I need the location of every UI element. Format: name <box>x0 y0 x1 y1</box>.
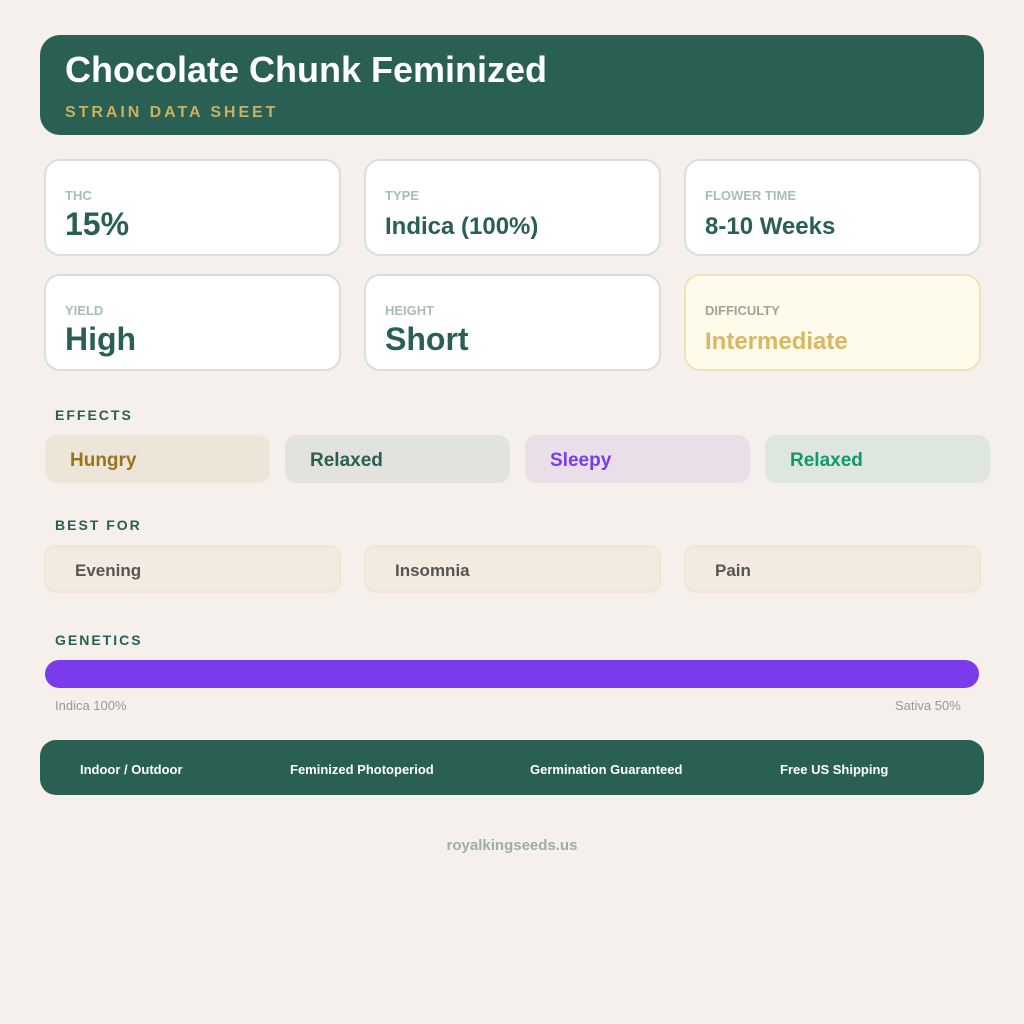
stat card: Height: HEIGHT <box>385 303 434 318</box>
best-for chip: Pain <box>684 545 981 593</box>
stat card: Flower Time: FLOWER TIME <box>705 188 796 203</box>
stat card: Yield: High <box>65 321 136 357</box>
subtitle: STRAIN DATA SHEET <box>65 104 278 121</box>
stat card: Yield <box>44 274 341 371</box>
stat card: Yield: YIELD <box>65 303 103 318</box>
effect chip: Relaxed: Relaxed <box>310 450 383 471</box>
stat card: Flower Time: 8-10 Weeks <box>705 213 835 240</box>
stat card: Type: Indica (100%) <box>385 213 538 240</box>
effect chip: Hungry: Hungry <box>70 450 136 471</box>
effect chip: Relaxed <box>285 435 510 483</box>
effect chip: Sleepy: Sleepy <box>550 450 611 471</box>
effect chip: Relaxed green: Relaxed <box>790 450 863 471</box>
header banner <box>40 35 984 135</box>
effect chip: Hungry <box>45 435 270 483</box>
stat card: Difficulty: DIFFICULTY <box>705 303 780 318</box>
section heading: genetics: GENETICS <box>55 632 143 648</box>
best-for chip: Evening <box>44 545 341 593</box>
genetics label: indica: Indica 100% <box>55 698 127 713</box>
stat card: THC <box>44 159 341 256</box>
title: Chocolate Chunk Feminized <box>65 49 547 90</box>
website url: royalkingseeds.us <box>447 837 577 854</box>
stat card: THC: THC <box>65 188 92 203</box>
stat card: Height <box>364 274 661 371</box>
section heading: effects: EFFECTS <box>55 407 133 423</box>
footer item: germination: Germination Guaranteed <box>530 762 682 777</box>
stat card: Flower Time <box>684 159 981 256</box>
best-for chip: Evening: Evening <box>75 561 141 580</box>
effect chip: Sleepy <box>525 435 750 483</box>
effect chip: Relaxed green <box>765 435 990 483</box>
best-for chip: Insomnia: Insomnia <box>395 561 470 580</box>
genetics bar <box>45 660 979 688</box>
stat card: Difficulty <box>684 274 981 371</box>
footer item: feminized: Feminized Photoperiod <box>290 762 434 777</box>
genetics label: sativa: Sativa 50% <box>895 698 961 713</box>
footer item: shipping: Free US Shipping <box>780 762 888 777</box>
best-for chip: Pain: Pain <box>715 561 751 580</box>
footer item: indoor outdoor: Indoor / Outdoor <box>80 762 183 777</box>
stat card: Type <box>364 159 661 256</box>
stat card: Difficulty: Intermediate <box>705 328 848 355</box>
stat card: Type: TYPE <box>385 188 419 203</box>
best-for chip: Insomnia <box>364 545 661 593</box>
stat card: Height: Short <box>385 321 469 357</box>
stat card: THC: 15% <box>65 206 129 242</box>
footer banner <box>40 740 984 795</box>
section heading: best for: BEST FOR <box>55 517 142 533</box>
